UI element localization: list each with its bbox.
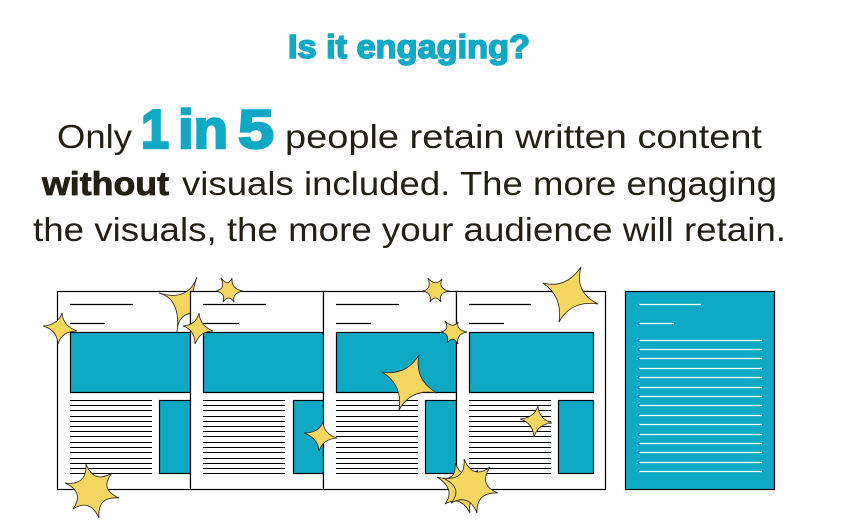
icon: sparkle on page 2 side block bbox=[304, 422, 337, 451]
title: Is it engaging? bbox=[288, 28, 530, 65]
sparkles bbox=[43, 267, 598, 518]
text: visuals included: visuals included. The more engaging bbox=[182, 165, 777, 202]
icon: sparkle near page 2 heading bbox=[183, 313, 213, 344]
text: the visuals: the visuals, the more your audience will retain. bbox=[33, 211, 786, 248]
icon: back sparkle of overlapping pair bbox=[437, 463, 486, 513]
icon: sparkle left edge bbox=[43, 313, 77, 344]
text: without: without bbox=[41, 165, 169, 202]
panel: page 2 with visuals bbox=[190, 292, 324, 490]
statistic: 1 in 5: 5 bbox=[238, 98, 274, 160]
text: people retain written content: people retain written content bbox=[285, 118, 762, 155]
statistic: 1 in 5: 1 bbox=[141, 98, 169, 160]
icon: sparkle six-point on page 3 hero bbox=[441, 321, 467, 344]
icon: sparkle six-point top of page 2 bbox=[216, 278, 243, 302]
icon: large sparkle on page 3 hero bbox=[382, 355, 437, 410]
icon: sparkle on page 4 text bbox=[520, 406, 552, 437]
icon: large sparkle top right of page 4 bbox=[543, 267, 598, 322]
text: Only: Only bbox=[57, 118, 133, 155]
icon: large sparkle behind page 2 bbox=[159, 277, 207, 332]
statistic: 1 in 5: in bbox=[178, 98, 228, 160]
body text bbox=[33, 98, 786, 248]
panel: page 1 with visuals bbox=[58, 292, 190, 490]
panel: page 3 with visuals bbox=[324, 292, 456, 490]
statistic: 1 in 5 bbox=[141, 98, 274, 160]
panel: text-only blue page bbox=[626, 292, 774, 490]
panel: page 4 with visuals bbox=[456, 292, 606, 490]
icon: front sparkle of overlapping pair bbox=[443, 459, 498, 513]
icon: sparkle six-point top of page 3 bbox=[423, 278, 449, 302]
icon: large sparkle bottom left bbox=[65, 464, 119, 518]
